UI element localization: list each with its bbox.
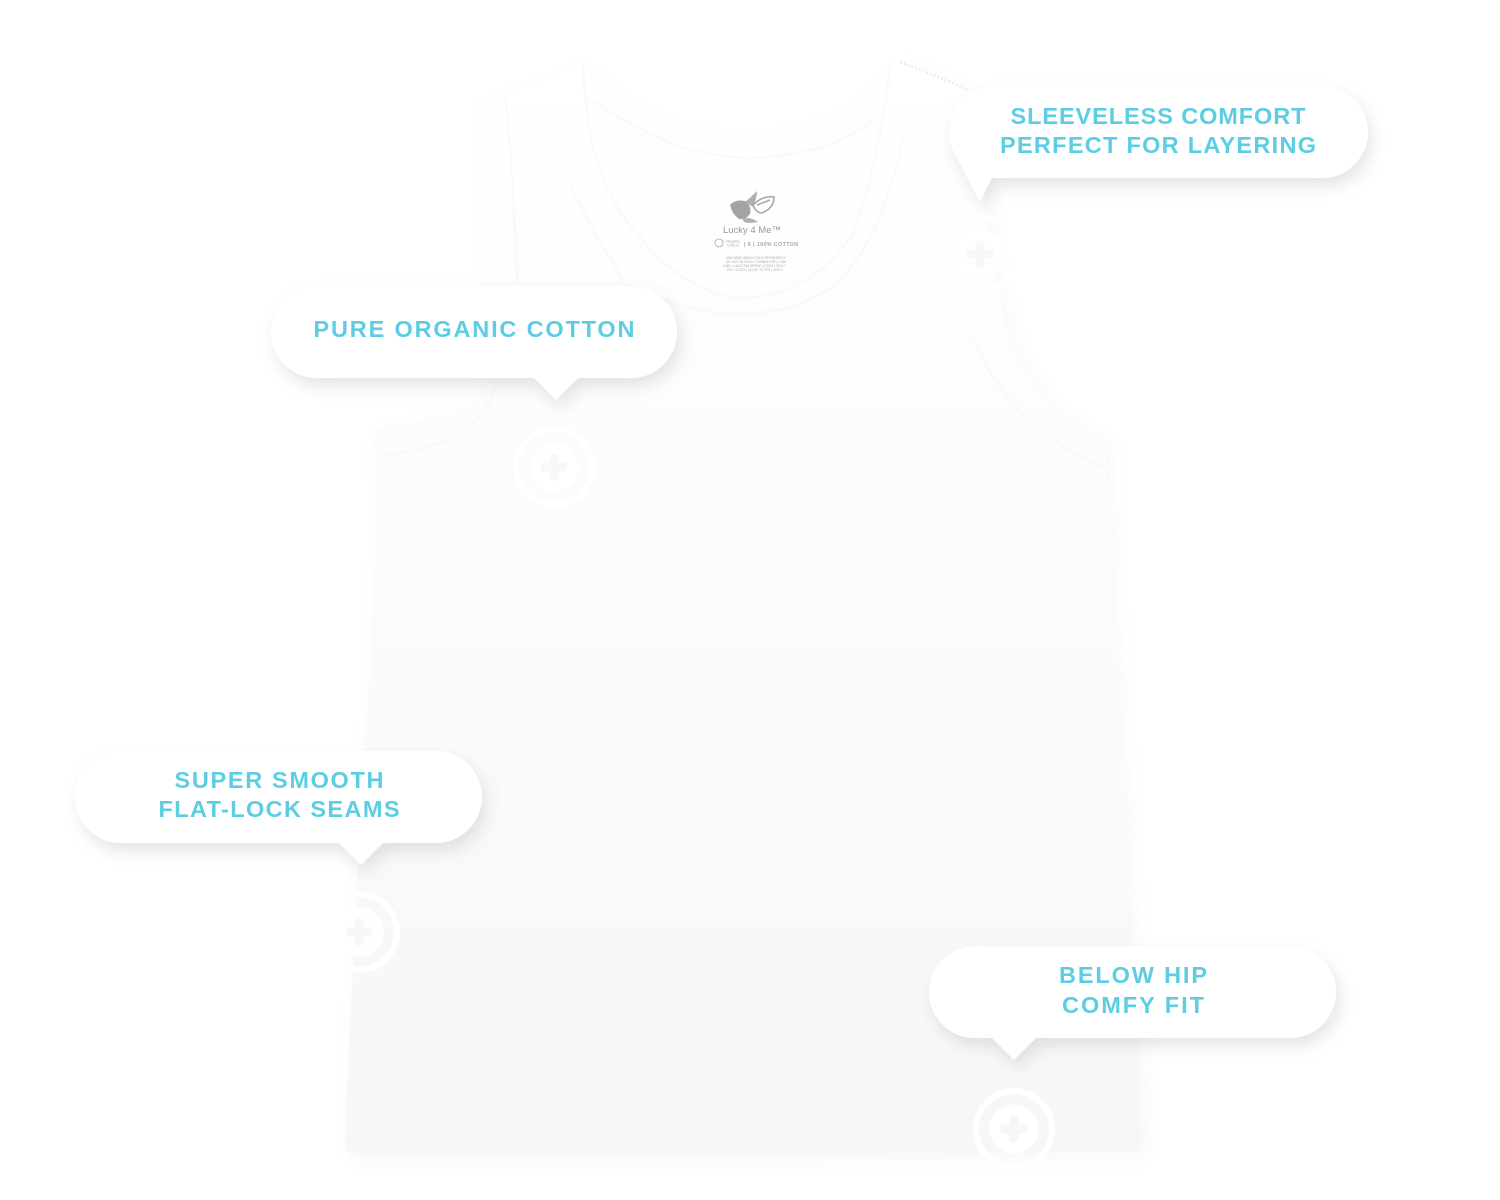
care instructions bbox=[723, 256, 787, 272]
callout: sleeveless comfort bbox=[949, 86, 1368, 202]
callout text: COMFY FIT bbox=[1062, 992, 1205, 1018]
marker: shoulder bbox=[942, 216, 1018, 292]
callout text: PURE ORGANIC COTTON bbox=[314, 316, 634, 342]
care instructions: MACHINE WASH COLD SEPARATELY bbox=[726, 256, 786, 260]
callout text: FLAT-LOCK SEAMS bbox=[158, 796, 400, 822]
callout: pure organic cotton bbox=[271, 286, 677, 400]
care instructions: 1661 | L623-T66-9PKW | C1/04 | 22/17 bbox=[723, 264, 785, 268]
brand name: Lucky 4 Me™ bbox=[723, 225, 781, 236]
marker: side seam bbox=[321, 894, 397, 970]
care instructions: DO NOT BLEACH, TUMBLE DRY LOW bbox=[726, 260, 787, 264]
shirt body bbox=[345, 58, 1142, 1154]
care instructions: RN 142355 | MADE IN SRI LANKA bbox=[727, 268, 784, 272]
marker: hem bbox=[976, 1091, 1052, 1167]
organic cotton wordmark: Organic bbox=[726, 238, 740, 244]
size and fabric line: | 6 | 100% COTTON bbox=[744, 242, 798, 248]
callout text bbox=[1059, 962, 1207, 1018]
callout text: SLEEVELESS COMFORT bbox=[1010, 103, 1306, 129]
neck interior with back collar bbox=[583, 62, 890, 298]
shoulder stitching bbox=[900, 62, 968, 90]
callout text: SUPER SMOOTH bbox=[174, 767, 384, 793]
callout: flat-lock seams bbox=[75, 751, 482, 865]
callout text: PERFECT FOR LAYERING bbox=[1000, 132, 1316, 158]
icon: goldfish logo bbox=[730, 191, 774, 223]
organic cotton wordmark: Cotton bbox=[727, 242, 739, 248]
callout text: BELOW HIP bbox=[1059, 962, 1207, 988]
organic cotton mark bbox=[715, 239, 723, 247]
marker: organic cotton bbox=[516, 429, 592, 505]
callout: below hip comfy fit bbox=[929, 946, 1336, 1060]
organic cotton wordmark bbox=[726, 238, 740, 248]
callout text bbox=[1000, 103, 1316, 158]
callout text bbox=[158, 767, 400, 822]
collar and armhole seams bbox=[347, 62, 1138, 1108]
neck label: Lucky 4 Me bbox=[715, 191, 798, 272]
tank top garment bbox=[345, 58, 1142, 1154]
